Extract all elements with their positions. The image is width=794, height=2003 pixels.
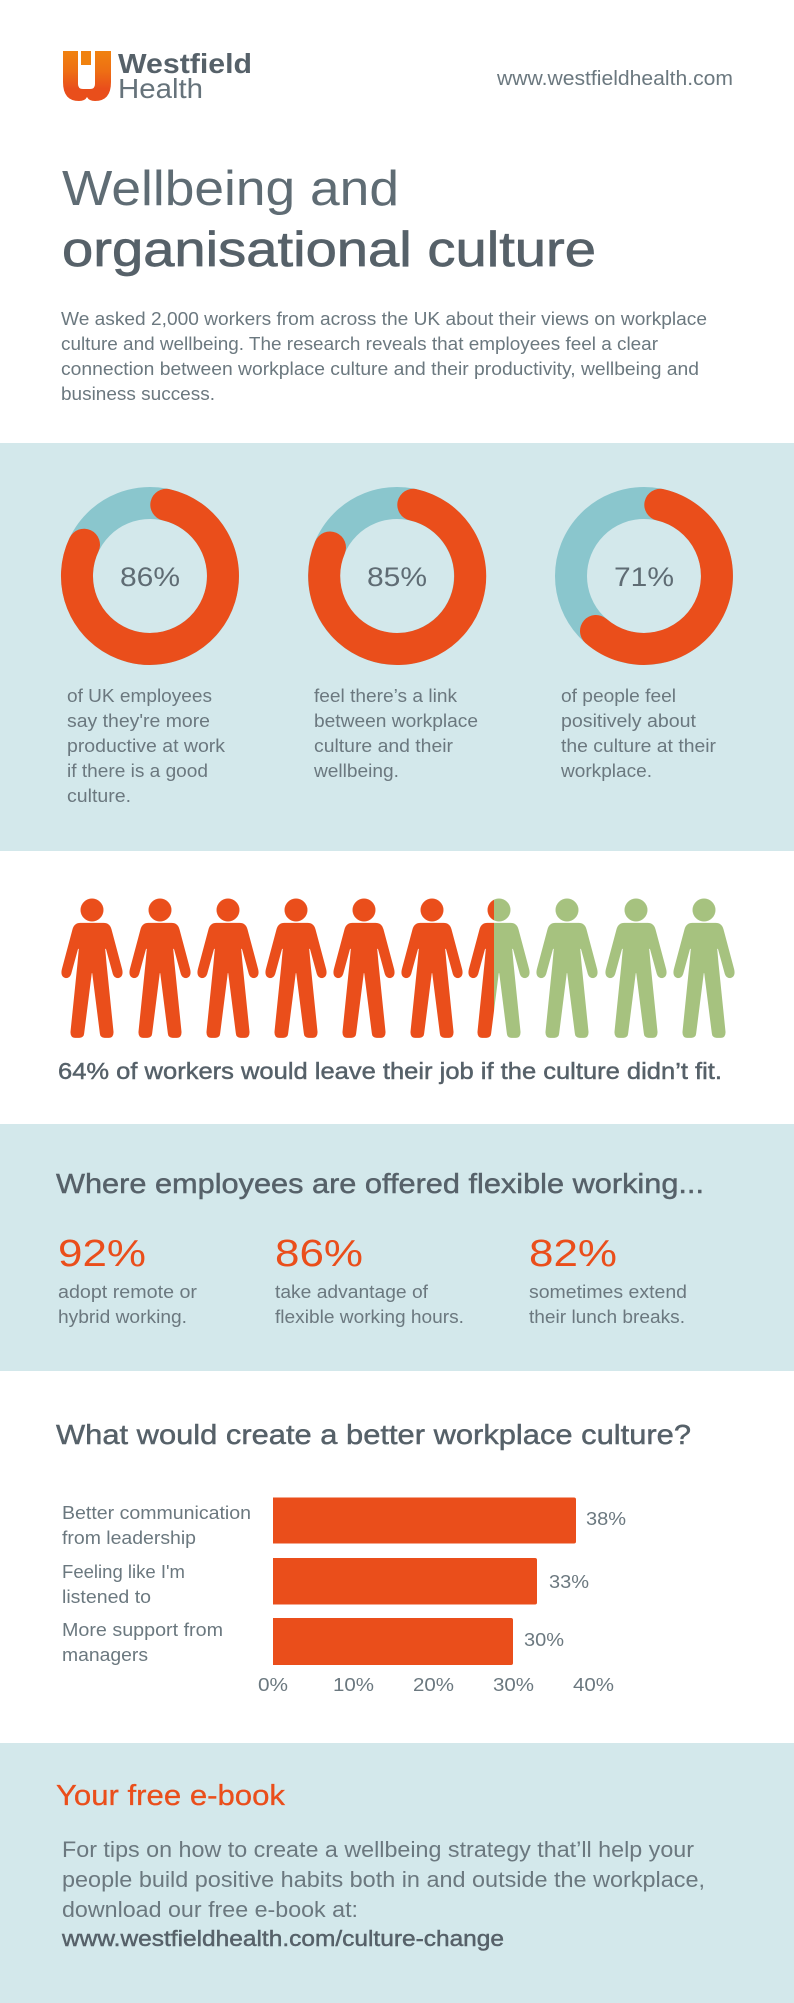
bar: feeling listened to: listened to	[62, 1587, 151, 1607]
bar: feeling listened to	[62, 1558, 589, 1607]
caption: 85%: between workplace	[314, 711, 478, 731]
stat: 82%: 82%	[529, 1233, 617, 1275]
donut: 85%: 85%	[367, 562, 427, 592]
caption: 85%	[313, 686, 478, 781]
bar: feeling listened to: 33%	[549, 1572, 589, 1592]
donut: 71%	[571, 503, 717, 649]
intro text: business success.	[61, 384, 215, 404]
intro text	[61, 309, 707, 404]
intro text: connection between workplace culture and their productivity, wellbeing and	[61, 359, 699, 379]
bar: more support: 30%	[524, 1630, 564, 1650]
e-book body text: download our free e-book at:	[62, 1897, 358, 1922]
chart axis labels: 20%	[413, 1675, 454, 1695]
heading: better workplace culture: What would create a better workplace culture?	[56, 1419, 691, 1450]
donut: 86%: 86%	[120, 562, 180, 592]
caption: 71%: the culture at their	[561, 736, 716, 756]
stat: 92%: adopt remote or	[58, 1282, 197, 1302]
stat: 82%	[529, 1233, 687, 1327]
chart axis labels: 10%	[333, 1675, 374, 1695]
caption: 86%: culture.	[67, 786, 131, 806]
heading: your free e-book: Your free e-book	[56, 1780, 286, 1812]
title: Wellbeing and	[62, 162, 399, 216]
chart axis labels	[258, 1675, 614, 1695]
bar chart	[62, 1498, 626, 1695]
stat: 86%: take advantage of	[275, 1282, 429, 1302]
title	[62, 162, 596, 277]
logo wordmark	[118, 48, 252, 104]
e-book body text: people build positive habits both in and outside the workplace,	[62, 1867, 705, 1892]
bar: more support: managers	[62, 1645, 148, 1665]
chart axis labels: 30%	[493, 1675, 534, 1695]
caption: 71%: of people feel	[561, 686, 676, 706]
bar: better communication	[62, 1498, 626, 1548]
stat: 86%: flexible working hours.	[275, 1307, 464, 1327]
bar: more support: More support from	[62, 1620, 223, 1640]
stat: 86%: 86%	[275, 1233, 363, 1275]
caption: 85%: culture and their	[314, 736, 453, 756]
logo wordmark: Health	[118, 73, 203, 104]
caption: 85%: feel there’s a link	[314, 686, 458, 706]
panel: free e-book	[0, 1743, 794, 2003]
donut: 86%	[77, 503, 223, 649]
donut: 71%: 71%	[614, 562, 674, 592]
logo wordmark: Westfield	[118, 48, 252, 79]
stat: 92%: 92%	[58, 1233, 146, 1275]
intro text: We asked 2,000 workers from across the UK about their views on workplace	[61, 309, 707, 329]
title: organisational culture	[62, 223, 596, 277]
caption: 86%: productive at work	[67, 736, 226, 756]
chart axis labels: 0%	[258, 1675, 288, 1695]
bar: better communication: from leadership	[62, 1528, 196, 1548]
bar: better communication: Better communication	[62, 1503, 251, 1523]
caption: 86%: if there is a good	[67, 761, 208, 781]
stat: 82%: their lunch breaks.	[529, 1307, 685, 1327]
stat: 82%: sometimes extend	[529, 1282, 687, 1302]
intro text: culture and wellbeing. The research reveals that employees feel a clear	[61, 334, 658, 354]
caption: 86%: say they're more	[67, 711, 210, 731]
panel: donut statistics	[0, 443, 794, 851]
stat: 92%	[58, 1233, 197, 1327]
heading: flexible working: Where employees are offered flexible working...	[56, 1168, 704, 1199]
e-book body text	[61, 1837, 705, 1951]
pictogram caption: 64% of workers would leave their job if the culture didn’t fit.	[58, 1058, 722, 1084]
panel: flexible working	[0, 1124, 794, 1371]
caption: 86%: of UK employees	[67, 686, 212, 706]
caption: 85%: wellbeing.	[313, 761, 399, 781]
bar: better communication: 38%	[586, 1509, 626, 1529]
caption: 71%	[560, 686, 716, 781]
stat: 86%	[275, 1233, 464, 1327]
pictogram: ten people, 64% orange	[62, 899, 734, 1037]
donut: 85%	[324, 503, 470, 649]
header: logo and website	[63, 48, 733, 104]
icon: Westfield Health logo mark	[63, 50, 111, 101]
bar: more support	[62, 1618, 564, 1665]
chart axis labels: 40%	[573, 1675, 614, 1695]
stat: 92%: hybrid working.	[58, 1307, 187, 1327]
e-book body text: For tips on how to create a wellbeing strategy that’ll help your	[62, 1837, 694, 1862]
bar: feeling listened to: Feeling like I'm	[62, 1562, 185, 1582]
caption: 71%: workplace.	[560, 761, 652, 781]
caption: 71%: positively about	[561, 711, 696, 731]
caption: 86%	[67, 686, 226, 806]
e-book body text: www.westfieldhealth.com/culture-change	[61, 1926, 504, 1951]
website address: www.westfieldhealth.com	[496, 68, 733, 90]
